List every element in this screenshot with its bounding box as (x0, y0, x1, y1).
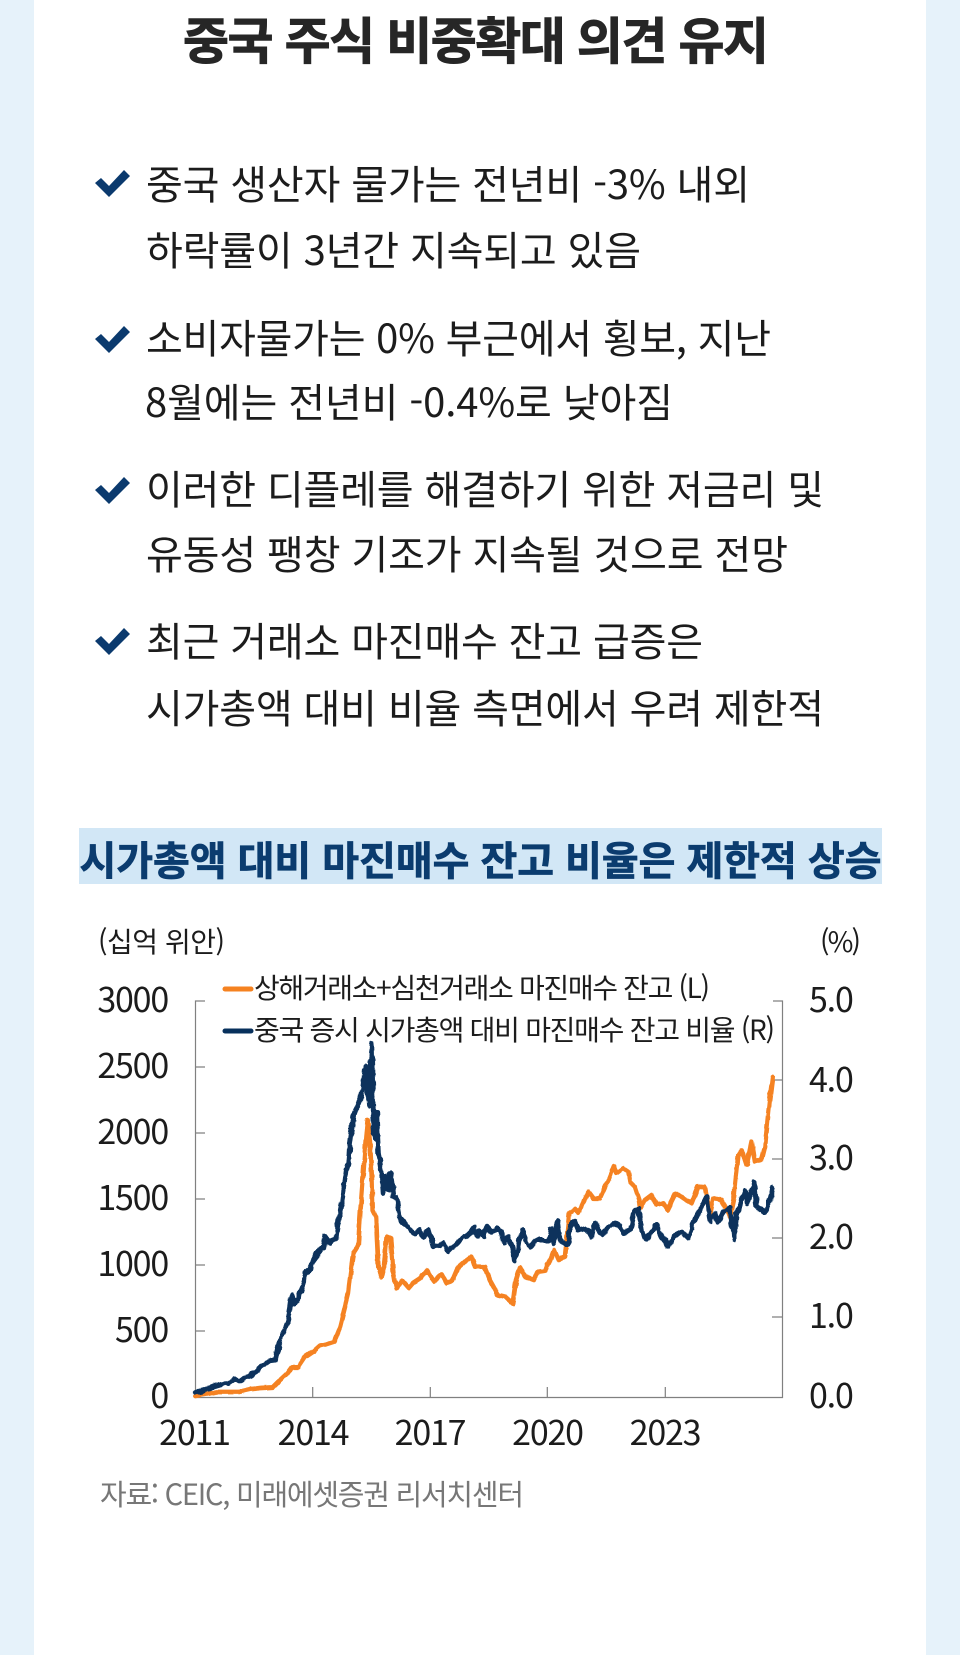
legend: 중국 증시 시가총액 대비 마진매수 잔고 비율 (R) (254, 1009, 775, 1049)
bullet 1 (95, 153, 750, 277)
legend: orange series (225, 986, 251, 992)
x axis labels: 2023 (630, 1406, 700, 1455)
left axis labels: 0 (150, 1369, 168, 1418)
x axis labels: 2014 (278, 1406, 349, 1455)
bullet 2: 8월에는 전년비 -0.4%로 낮아짐 (145, 371, 673, 429)
legend: 상해거래소+심천거래소 마진매수 잔고 (L) (254, 967, 710, 1007)
left axis labels: 1000 (97, 1237, 168, 1286)
right axis labels (809, 973, 853, 1418)
bullet 3: 이러한 디플레를 해결하기 위한 저금리 및 (146, 458, 824, 516)
bullet 3 (95, 458, 824, 581)
orange line: margin balance (195, 1077, 773, 1396)
bullet 1: 하락률이 3년간 지속되고 있음 (146, 219, 641, 277)
bullet 4: 시가총액 대비 비율 측면에서 우려 제한적 (146, 677, 824, 735)
source note: 자료: CEIC, 미래에셋증권 리서치센터 (100, 1472, 524, 1514)
x axis labels (159, 1406, 700, 1455)
bullet 4 (95, 610, 824, 735)
x axis labels: 2020 (512, 1406, 583, 1455)
bullet 3: 유동성 팽창 기조가 지속될 것으로 전망 (146, 523, 788, 581)
x axis labels: 2017 (395, 1406, 466, 1455)
left axis labels: 3000 (97, 973, 168, 1022)
bullet 4: 최근 거래소 마진매수 잔고 급증은 (146, 610, 703, 668)
title: 중국 주식 비중확대 의견 유지 (183, 2, 769, 74)
chart heading: 시가총액 대비 마진매수 잔고 비율은 제한적 상승 (80, 829, 882, 887)
legend: navy series (225, 1028, 251, 1034)
axes frame (195, 1001, 782, 1398)
navy line: margin balance to market cap ratio (195, 1043, 773, 1393)
right axis labels: 0.0 (809, 1369, 853, 1418)
right axis labels: 3.0 (809, 1131, 853, 1180)
left axis labels: 1500 (97, 1171, 168, 1220)
bullet 1: 중국 생산자 물가는 전년비 -3% 내외 (146, 153, 750, 211)
right axis labels: 2.0 (809, 1210, 853, 1259)
left axis labels (97, 973, 168, 1418)
left axis unit: (십억 위안) (98, 921, 225, 961)
right axis labels: 1.0 (809, 1289, 853, 1338)
chart: margin balance and ratio (97, 921, 861, 1455)
bullet 2 (95, 307, 771, 429)
x axis labels: 2011 (159, 1406, 230, 1455)
legend (225, 967, 775, 1049)
left axis labels: 2000 (97, 1105, 168, 1154)
bullet 2: 소비자물가는 0% 부근에서 횡보, 지난 (146, 307, 771, 365)
right axis unit: (%) (820, 921, 861, 961)
left axis labels: 500 (115, 1303, 168, 1352)
right axis labels: 4.0 (809, 1053, 853, 1102)
right axis labels: 5.0 (809, 973, 853, 1022)
bullet list (95, 153, 824, 735)
left axis labels: 2500 (97, 1039, 168, 1088)
